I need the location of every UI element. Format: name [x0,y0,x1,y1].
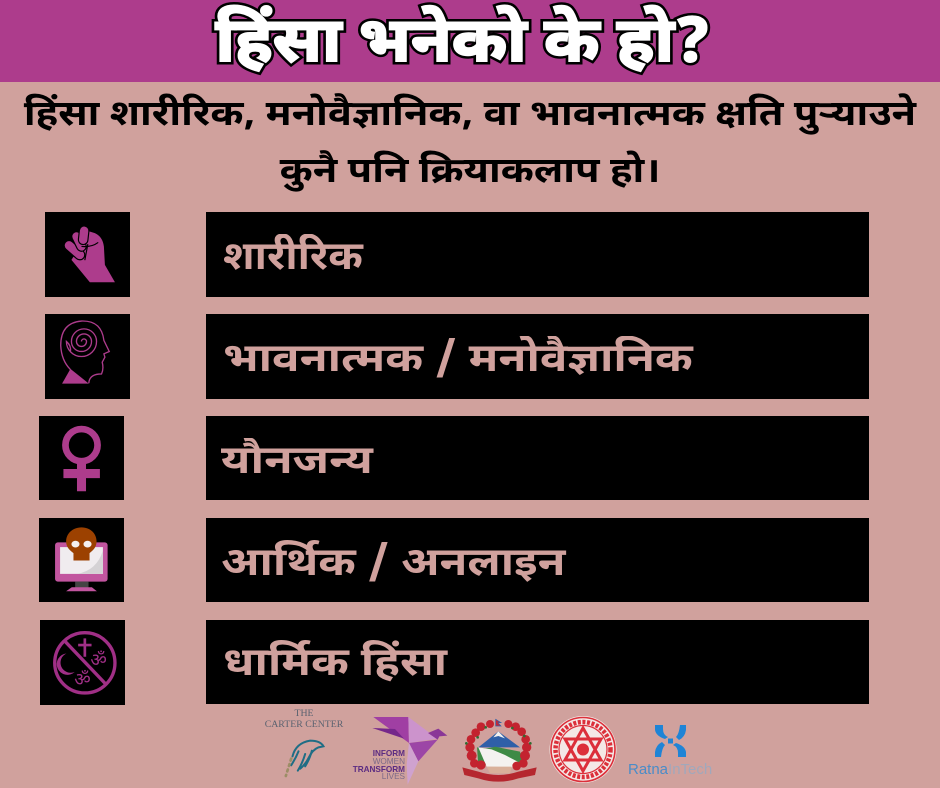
panel: physical label: शारीरिक [223,234,363,285]
panel: sexual label [206,416,869,500]
panel: economic/online label: आर्थिक / अनलाइन [221,540,565,591]
panel: sexual icon [39,416,124,500]
panel: physical label [206,212,869,297]
definition text: हिंसा शारीरिक, मनोवैज्ञानिक, वा भावनात्मक क्षति पुऱ्याउने [24,95,916,140]
panel: physical icon [45,212,130,297]
panel: religious icon: ॐ [90,651,107,674]
logo mark [655,725,686,757]
panel: religious label [206,620,869,704]
panel: religious icon [40,620,125,705]
panel: religious icon: ॐ [74,670,91,693]
logo: The Carter Center [265,708,344,778]
title banner [0,0,940,82]
panel: emotional icon [45,314,130,399]
logo: Kathmandu Metropolitan City [550,716,616,783]
panel: economic/online icon [39,518,124,602]
logo: RatnaInTech [628,725,712,778]
logo bird [372,717,448,784]
panel: sexual label: यौनजन्य [221,438,373,489]
definition text: कुनै पनि क्रियाकलाप हो। [280,152,660,197]
logo text: RatnaInTech [628,761,712,778]
logo: Nepal emblem [462,718,537,782]
definition text [24,93,917,197]
logo: Inform Women [352,717,448,784]
panel: emotional label [206,314,869,399]
logo text [352,749,405,781]
panel: emotional label: भावनात्मक / मनोवैज्ञानिक [223,336,693,387]
logo text: INFORM [373,749,405,758]
logo text: THE [294,708,314,719]
logo text: LIVES [382,772,405,781]
panel: religious label: धार्मिक हिंसा [223,640,447,691]
logo text [265,708,344,730]
logo text: TRANSFORM [353,765,405,774]
logo text: WOMEN [373,757,405,766]
panel: economic/online label [206,518,869,602]
logo eagle [284,740,325,778]
logo text: CARTER CENTER [265,718,343,730]
